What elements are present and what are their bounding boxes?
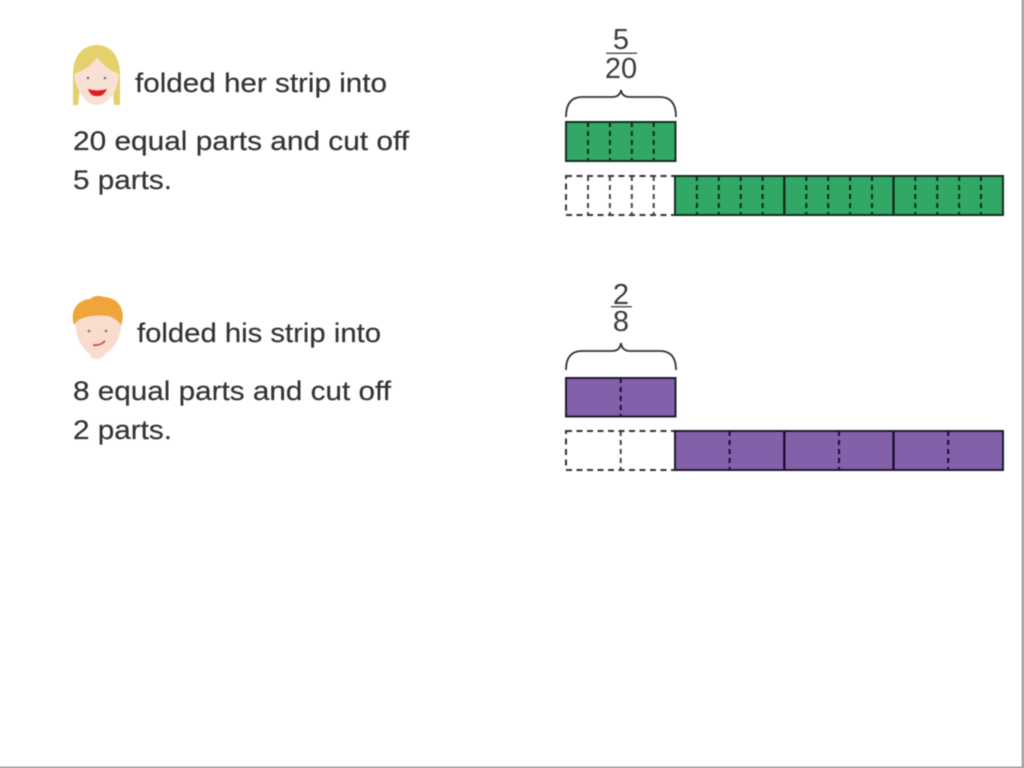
purple remaining strip (675, 431, 1003, 470)
fraction: 5/20: 5 (613, 24, 629, 56)
green cut-off strip (566, 122, 676, 161)
panel: boy's strip explanation (73, 296, 392, 445)
fraction: 5/20 (605, 24, 637, 85)
purple cut-off strip (566, 378, 676, 416)
fraction: 2/8: 8 (613, 306, 629, 338)
text: 20 equal parts and cut off: 20 equal parts and cut off (73, 126, 410, 156)
text: 8 equal parts and cut off: 8 equal parts and cut off (73, 376, 392, 406)
panel: green fraction strips (566, 24, 1003, 215)
icon: blonde girl face (73, 45, 120, 105)
text: 2 parts.: 2 parts. (73, 415, 172, 445)
fraction: 5/20: 20 (605, 53, 637, 85)
fraction: 2/8: 2 (613, 279, 629, 311)
panel: girl's strip explanation (73, 45, 410, 195)
panel: purple fraction strips (566, 279, 1003, 470)
dashed outline of removed part (566, 431, 676, 470)
text: 5 parts.: 5 parts. (73, 165, 172, 195)
text: folded her strip into: folded her strip into (135, 68, 387, 98)
brace over cut-off part (566, 343, 676, 370)
green remaining strip (675, 176, 1003, 215)
brace over cut-off part (566, 90, 676, 117)
fraction: 2/8 (611, 279, 632, 338)
text: folded his strip into: folded his strip into (137, 318, 381, 348)
icon: ginger boy face (73, 296, 123, 359)
dashed outline of removed part (566, 176, 676, 215)
